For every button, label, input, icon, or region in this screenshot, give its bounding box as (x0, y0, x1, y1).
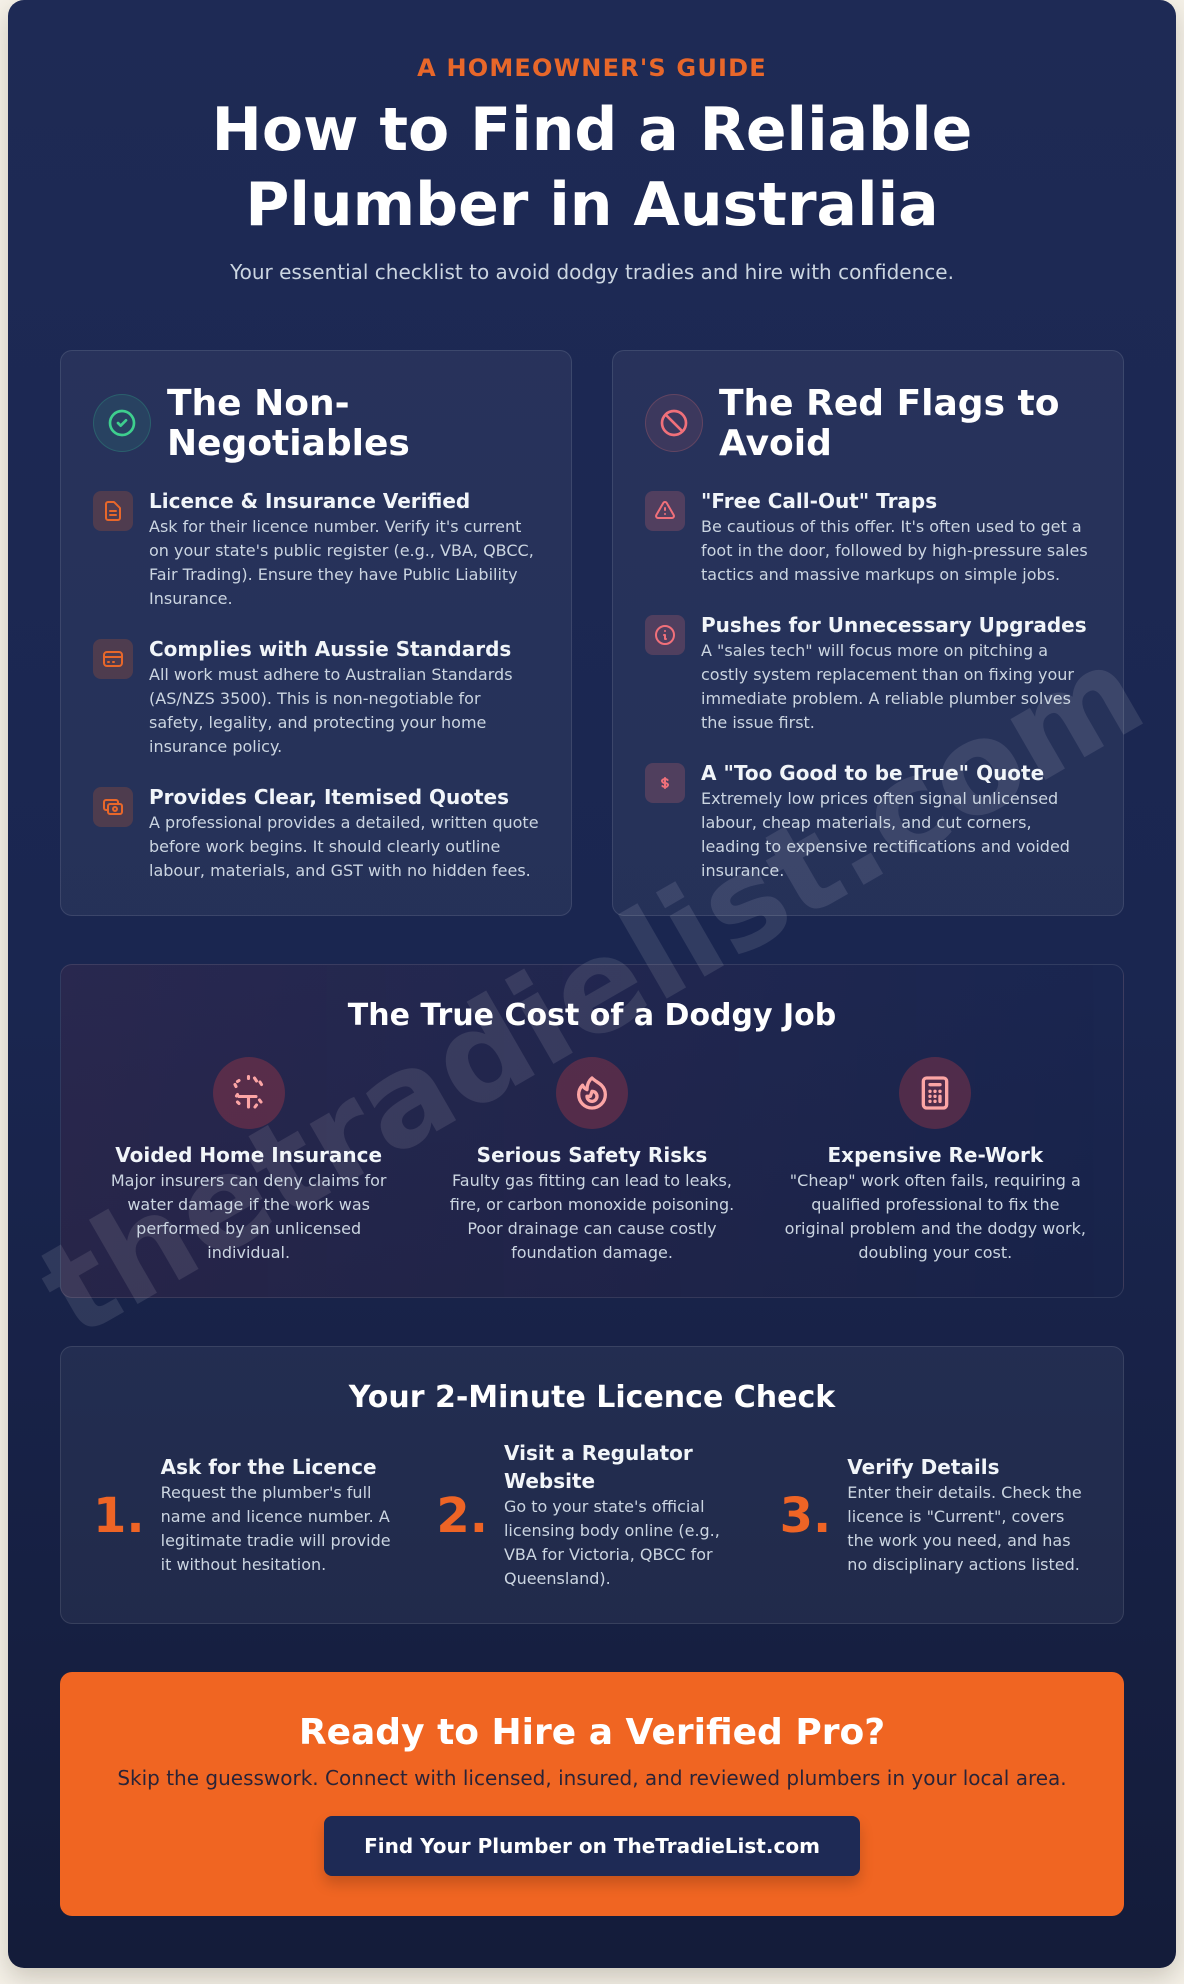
cta text: Skip the guesswork. Connect with licensed, insured, and reviewed plumbers in your local area. (117, 1766, 1067, 1790)
item: unnecessary upgrades (645, 613, 1087, 732)
item text: Ask for their licence number. Verify it's current on your state's public register (e.g., VBA, QBCC, Fair Trading). Ensure they have Public Liability Insurance. (149, 517, 534, 608)
panel: licence check (60, 1346, 1124, 1624)
steps (93, 1441, 1082, 1588)
icon: info circle (645, 615, 685, 655)
icon: cash (93, 787, 133, 827)
panel heading (93, 383, 410, 464)
step text (504, 1441, 720, 1588)
cost columns (111, 1057, 1086, 1262)
step text: Request the plumber's full name and licence number. A legitimate tradie will provide it without hesitation. (161, 1483, 391, 1574)
heading: The Red Flags to Avoid (719, 383, 1059, 464)
eyebrow: A HOMEOWNER'S GUIDE (417, 54, 767, 82)
number: 3. (780, 1488, 831, 1544)
step text: Go to your state's official licensing body online (e.g., VBA for Victoria, QBCC for Queensland). (504, 1497, 720, 1588)
item text: Pushes for Unnecessary Upgrades (701, 613, 1087, 637)
cost: re-work (785, 1057, 1086, 1262)
cta heading: Ready to Hire a Verified Pro? (299, 1712, 885, 1753)
panel heading (645, 383, 1059, 464)
icon: document (93, 491, 133, 531)
step text: Verify Details (847, 1455, 1000, 1479)
panel: true cost (60, 964, 1124, 1298)
cta button: Find Your Plumber on TheTradieList.com (364, 1834, 820, 1858)
two column comparison (60, 350, 1124, 916)
header (212, 54, 972, 284)
item text: Provides Clear, Itemised Quotes (149, 785, 509, 809)
item: too good quote (645, 761, 1070, 880)
item text: Licence & Insurance Verified (149, 489, 470, 513)
cost: safety risks (450, 1057, 734, 1262)
item heading: Expensive Re-Work (828, 1143, 1043, 1167)
item: itemised quotes (93, 785, 539, 880)
item: free call-out (645, 489, 1088, 584)
item text: Extremely low prices often signal unlicensed labour, cheap materials, and cut corners, leading to expensive rectifications and voided insurance. (701, 789, 1070, 880)
panel: the red flags (612, 350, 1124, 916)
item: licence and insurance (93, 489, 534, 608)
subtitle: Your essential checklist to avoid dodgy tradies and hire with confidence. (230, 260, 954, 284)
watermark: thetradielist.com (16, 616, 1167, 1367)
icon: card (93, 639, 133, 679)
item text: A "Too Good to be True" Quote (701, 761, 1044, 785)
heading: The Non-Negotiables (167, 383, 410, 464)
cost: voided insurance (111, 1057, 386, 1262)
item text: All work must adhere to Australian Standards (AS/NZS 3500). This is non-negotiable for safety, legality, and protecting your home insurance policy. (149, 665, 513, 756)
step text: Enter their details. Check the licence is "Current", covers the work you need, and has no disciplinary actions listed. (847, 1483, 1082, 1574)
title (212, 95, 972, 240)
number: 2. (436, 1488, 488, 1544)
item heading: Serious Safety Risks (477, 1143, 707, 1167)
item text: Complies with Aussie Standards (149, 637, 511, 661)
icon: flame (556, 1057, 628, 1129)
panel: the non-negotiables (60, 350, 572, 916)
step 3 (780, 1455, 1082, 1574)
icon: ban (645, 394, 703, 452)
step text: Visit a Regulator Website (504, 1441, 693, 1493)
icon: calculator (899, 1057, 971, 1129)
item text: "Cheap" work often fails, requiring a qualified professional to fix the original problem and the dodgy work, doubling your cost. (785, 1171, 1086, 1262)
item text: "Free Call-Out" Traps (701, 489, 937, 513)
item text: Faulty gas fitting can lead to leaks, fire, or carbon monoxide poisoning. Poor drainage can cause costly foundation damage. (450, 1171, 734, 1262)
item text: Major insurers can deny claims for water damage if the work was performed by an unlicensed individual. (111, 1171, 386, 1262)
call to action (60, 1672, 1124, 1916)
title: How to Find a Reliable (212, 95, 972, 165)
step text: Ask for the Licence (161, 1455, 377, 1479)
item text: A professional provides a detailed, written quote before work begins. It should clearly outline labour, materials, and GST with no hidden fees. (149, 813, 539, 880)
item text: Be cautious of this offer. It's often used to get a foot in the door, followed by high-pressure sales tactics and massive markups on simple jobs. (701, 517, 1088, 584)
icon: broken umbrella (213, 1057, 285, 1129)
icon: warning triangle (645, 491, 685, 531)
heading: The True Cost of a Dodgy Job (348, 998, 836, 1033)
number: 1. (93, 1488, 145, 1544)
step 2 (436, 1441, 720, 1588)
item heading: Voided Home Insurance (115, 1143, 382, 1167)
item text: A "sales tech" will focus more on pitching a costly system replacement than on fixing your immediate problem. A reliable plumber solves the issue first. (701, 641, 1074, 732)
cta button (324, 1816, 860, 1876)
icon: dollar (645, 763, 685, 803)
icon: check circle (93, 394, 151, 452)
step 1 (93, 1455, 391, 1574)
title: Plumber in Australia (245, 170, 939, 240)
heading: Your 2-Minute Licence Check (349, 1380, 835, 1415)
item: aussie standards (93, 637, 513, 756)
